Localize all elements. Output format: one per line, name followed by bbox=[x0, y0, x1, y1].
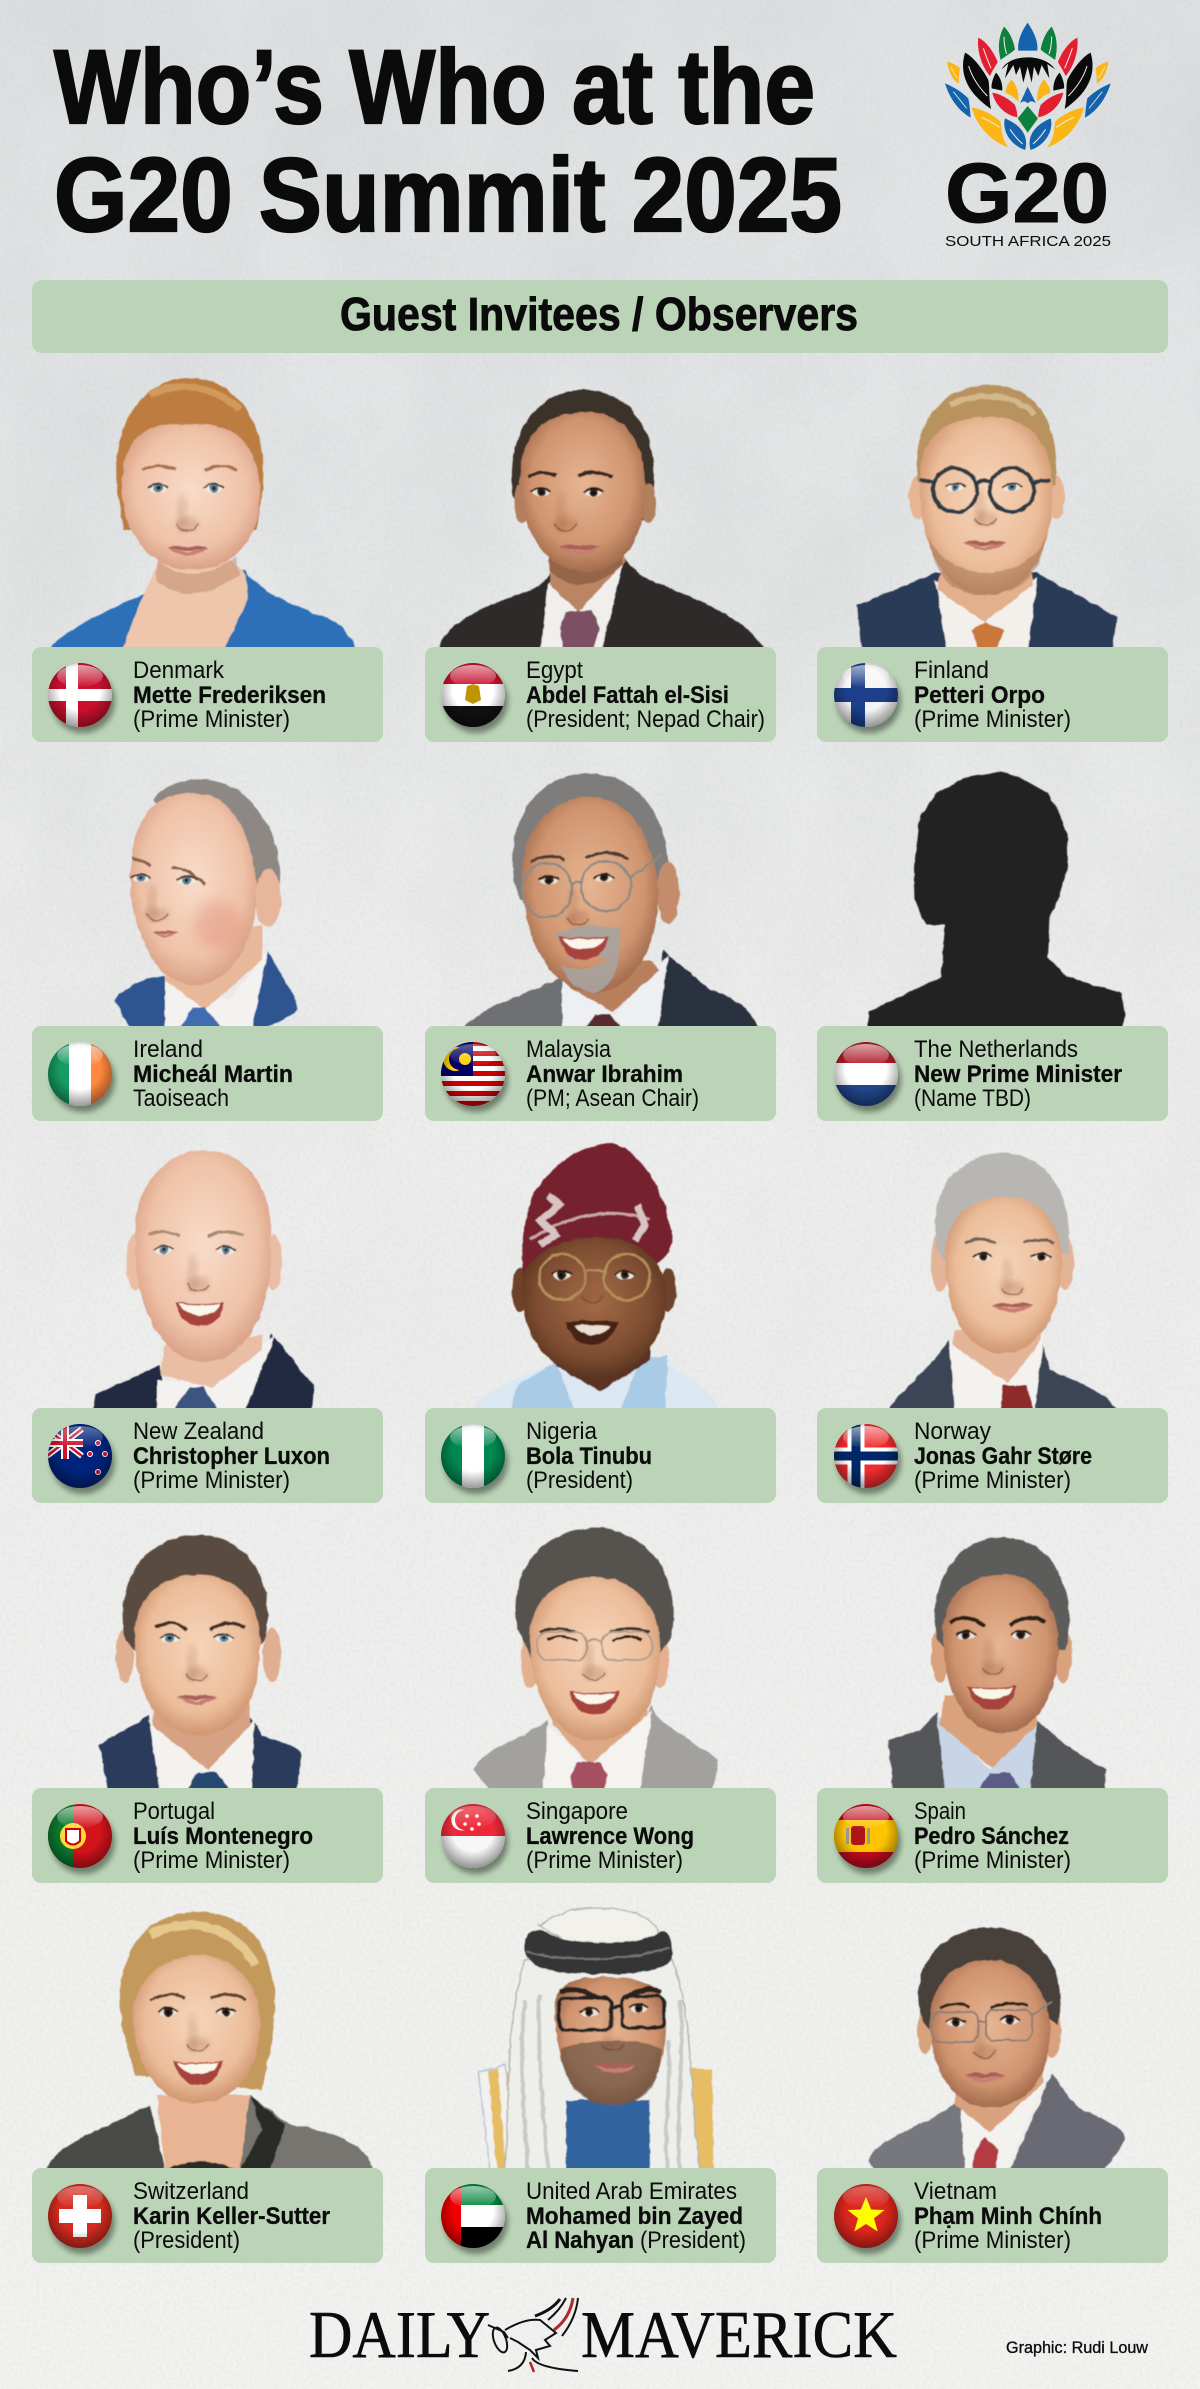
text: Spain details: Spain bbox=[914, 1798, 966, 1825]
text: Vietnam details: Phạm Minh Chính bbox=[914, 2203, 1102, 2230]
card panel bbox=[425, 647, 776, 742]
card panel bbox=[425, 2168, 776, 2263]
icon: flag of Portugal bbox=[47, 1803, 115, 1874]
text: Portugal details bbox=[133, 1798, 313, 1874]
portrait: Abdel Fattah el-Sisi bbox=[439, 390, 765, 650]
card panel bbox=[817, 2168, 1168, 2263]
portrait: Phạm Minh Chính bbox=[868, 1927, 1125, 2170]
heading banner: Guest Invitees / Observers: Guest Invitees / Observers bbox=[340, 288, 858, 340]
portrait: Mette Frederiksen bbox=[48, 378, 357, 650]
text: Norway details bbox=[914, 1418, 1092, 1494]
text: Finland details: Petteri Orpo bbox=[914, 682, 1045, 709]
text: Nigeria details: Bola Tinubu bbox=[526, 1443, 652, 1470]
text: Singapore details bbox=[526, 1798, 694, 1874]
icon: protea flower bbox=[945, 23, 1111, 150]
text: Singapore details: Singapore bbox=[526, 1798, 628, 1825]
panel: Vietnam bbox=[817, 1927, 1168, 2263]
icon: flag of Switzerland bbox=[47, 2183, 115, 2254]
credit: Graphic: Rudi Louw: Graphic: Rudi Louw bbox=[1006, 2338, 1149, 2357]
card panel bbox=[817, 1026, 1168, 1121]
icon: flag of The Netherlands bbox=[833, 1041, 901, 1112]
footer logo: Daily Maverick bbox=[309, 2298, 897, 2372]
portrait: silhouette of unnamed Prime Minister bbox=[868, 771, 1125, 1029]
text: The Netherlands details: The Netherlands bbox=[914, 1036, 1078, 1063]
text: Spain details: Pedro Sánchez bbox=[914, 1823, 1069, 1850]
text: Norway details: Norway bbox=[914, 1418, 991, 1445]
panel: Switzerland bbox=[32, 1912, 383, 2263]
portrait: Pedro Sánchez bbox=[888, 1537, 1106, 1790]
portrait: Luís Montenegro bbox=[99, 1535, 302, 1790]
text: Ireland details bbox=[133, 1036, 293, 1112]
text: The Netherlands details bbox=[914, 1036, 1122, 1112]
portrait: Bola Tinubu bbox=[470, 1143, 719, 1411]
text: Nigeria details: (President) bbox=[526, 1467, 633, 1494]
text: Denmark details: Denmark bbox=[133, 657, 225, 684]
card panel bbox=[425, 1788, 776, 1883]
icon: flag of Ireland bbox=[47, 1041, 115, 1112]
portrait: Jonas Gahr Støre bbox=[888, 1153, 1117, 1411]
portrait: Petteri Orpo bbox=[857, 385, 1117, 650]
panel: Malaysia bbox=[425, 773, 776, 1121]
text: Egypt details: (President; Nepad Chair) bbox=[526, 706, 765, 733]
footer logo: Daily Maverick: MAVERICK bbox=[581, 2298, 897, 2372]
text: New Zealand details bbox=[133, 1418, 330, 1494]
logo: G20 South Africa 2025: G20 bbox=[945, 146, 1109, 240]
text: Finland details bbox=[914, 657, 1071, 733]
panel: Ireland bbox=[32, 779, 383, 1121]
text: Spain details bbox=[914, 1798, 1071, 1874]
text: Switzerland details: Switzerland bbox=[133, 2178, 249, 2205]
text: United Arab Emirates details: (President) bbox=[640, 2227, 746, 2254]
icon: eagle bbox=[488, 2298, 578, 2372]
panel: The Netherlands bbox=[817, 771, 1168, 1121]
text: Denmark details bbox=[133, 657, 326, 733]
panel: Egypt bbox=[425, 390, 776, 742]
text: Vietnam details: Vietnam bbox=[914, 2178, 997, 2205]
text: Portugal details: Luís Montenegro bbox=[133, 1823, 313, 1850]
icon: flag of Singapore bbox=[440, 1803, 508, 1874]
heading banner: Guest Invitees / Observers bbox=[32, 280, 1168, 353]
text: Singapore details: Lawrence Wong bbox=[526, 1823, 694, 1850]
title: G20 Summit 2025 bbox=[54, 137, 842, 254]
text: Norway details: (Prime Minister) bbox=[914, 1467, 1071, 1494]
icon: flag of United Arab Emirates bbox=[440, 2183, 508, 2254]
card panel bbox=[32, 1408, 383, 1503]
background: textured paper bbox=[0, 0, 1200, 1902]
card panel bbox=[425, 1408, 776, 1503]
text: Portugal details: Portugal bbox=[133, 1798, 215, 1825]
icon: flag of Spain bbox=[833, 1803, 901, 1874]
text: Nigeria details: Nigeria bbox=[526, 1418, 598, 1445]
portrait: Karin Keller-Sutter bbox=[46, 1912, 373, 2170]
text: The Netherlands details: (Name TBD) bbox=[914, 1085, 1031, 1112]
text: Malaysia details bbox=[526, 1036, 699, 1112]
footer logo: Daily Maverick: DAILY bbox=[309, 2298, 490, 2372]
text: Vietnam details bbox=[914, 2178, 1102, 2254]
text: Malaysia details: (PM; Asean Chair) bbox=[526, 1085, 699, 1112]
text: Egypt details: Egypt bbox=[526, 657, 583, 684]
panel: Spain bbox=[817, 1537, 1168, 1883]
text: Nigeria details bbox=[526, 1418, 652, 1494]
text: Vietnam details: (Prime Minister) bbox=[914, 2227, 1071, 2254]
panel: United Arab Emirates bbox=[425, 1908, 776, 2263]
panel: New Zealand bbox=[32, 1150, 383, 1503]
icon: flag of Norway bbox=[833, 1423, 901, 1494]
portrait: Lawrence Wong bbox=[474, 1528, 719, 1790]
card panel bbox=[817, 1788, 1168, 1883]
card panel bbox=[32, 1788, 383, 1883]
title bbox=[54, 29, 842, 254]
portrait: Anwar Ibrahim bbox=[463, 773, 757, 1029]
portrait: Micheál Martin bbox=[115, 779, 297, 1029]
text: Norway details: Jonas Gahr Støre bbox=[914, 1443, 1092, 1470]
panel: Denmark bbox=[32, 378, 383, 742]
panel: Singapore bbox=[425, 1528, 776, 1883]
text: Portugal details: (Prime Minister) bbox=[133, 1847, 290, 1874]
text: Malaysia details: Anwar Ibrahim bbox=[526, 1061, 683, 1088]
text: Denmark details: Mette Frederiksen bbox=[133, 682, 326, 709]
icon: flag of Malaysia bbox=[440, 1041, 508, 1112]
logo: G20 South Africa 2025 bbox=[945, 23, 1111, 250]
panel: Finland bbox=[817, 385, 1168, 742]
text: Switzerland details bbox=[133, 2178, 330, 2254]
text: United Arab Emirates details: United Arab Emirates bbox=[526, 2178, 737, 2205]
text: Ireland details: Micheál Martin bbox=[133, 1061, 293, 1088]
text: United Arab Emirates details bbox=[526, 2178, 746, 2254]
icon: flag of Nigeria bbox=[440, 1423, 508, 1494]
text: Egypt details bbox=[526, 657, 765, 733]
text: Denmark details: (Prime Minister) bbox=[133, 706, 290, 733]
icon: flag of Denmark bbox=[47, 662, 115, 733]
text: New Zealand details: Christopher Luxon bbox=[133, 1443, 330, 1470]
icon: flag of Egypt bbox=[440, 662, 508, 733]
text: Finland details: (Prime Minister) bbox=[914, 706, 1071, 733]
portrait: Mohamed bin Zayed Al Nahyan bbox=[478, 1908, 714, 2170]
panel: Norway bbox=[817, 1153, 1168, 1503]
card panel bbox=[817, 1408, 1168, 1503]
icon: flag of New Zealand bbox=[47, 1423, 115, 1494]
panel: Nigeria bbox=[425, 1143, 776, 1503]
card panel bbox=[32, 2168, 383, 2263]
title: Who’s Who at the bbox=[54, 29, 815, 146]
text: Singapore details: (Prime Minister) bbox=[526, 1847, 683, 1874]
text: United Arab Emirates details: Mohamed bin Zayed bbox=[526, 2203, 743, 2230]
text: The Netherlands details: New Prime Minister bbox=[914, 1061, 1122, 1088]
text: Egypt details: Abdel Fattah el-Sisi bbox=[526, 682, 729, 709]
text: New Zealand details: New Zealand bbox=[133, 1418, 264, 1445]
text: Switzerland details: Karin Keller-Sutter bbox=[133, 2203, 330, 2230]
text: United Arab Emirates details: Al Nahyan bbox=[526, 2227, 634, 2254]
text: Ireland details: Taoiseach bbox=[133, 1085, 229, 1112]
text: Spain details: (Prime Minister) bbox=[914, 1847, 1071, 1874]
logo: G20 South Africa 2025: SOUTH AFRICA 2025 bbox=[945, 233, 1111, 250]
card panel bbox=[817, 647, 1168, 742]
icon: flag of Vietnam bbox=[833, 2183, 901, 2254]
text: Ireland details: Ireland bbox=[133, 1036, 203, 1063]
text: New Zealand details: (Prime Minister) bbox=[133, 1467, 290, 1494]
panel: Portugal bbox=[32, 1535, 383, 1883]
card panel bbox=[32, 1026, 383, 1121]
card panel bbox=[425, 1026, 776, 1121]
text: Finland details: Finland bbox=[914, 657, 989, 684]
icon: flag of Finland bbox=[833, 662, 901, 733]
text: Malaysia details: Malaysia bbox=[526, 1036, 612, 1063]
portrait: Christopher Luxon bbox=[92, 1150, 314, 1411]
card panel bbox=[32, 647, 383, 742]
text: Switzerland details: (President) bbox=[133, 2227, 240, 2254]
